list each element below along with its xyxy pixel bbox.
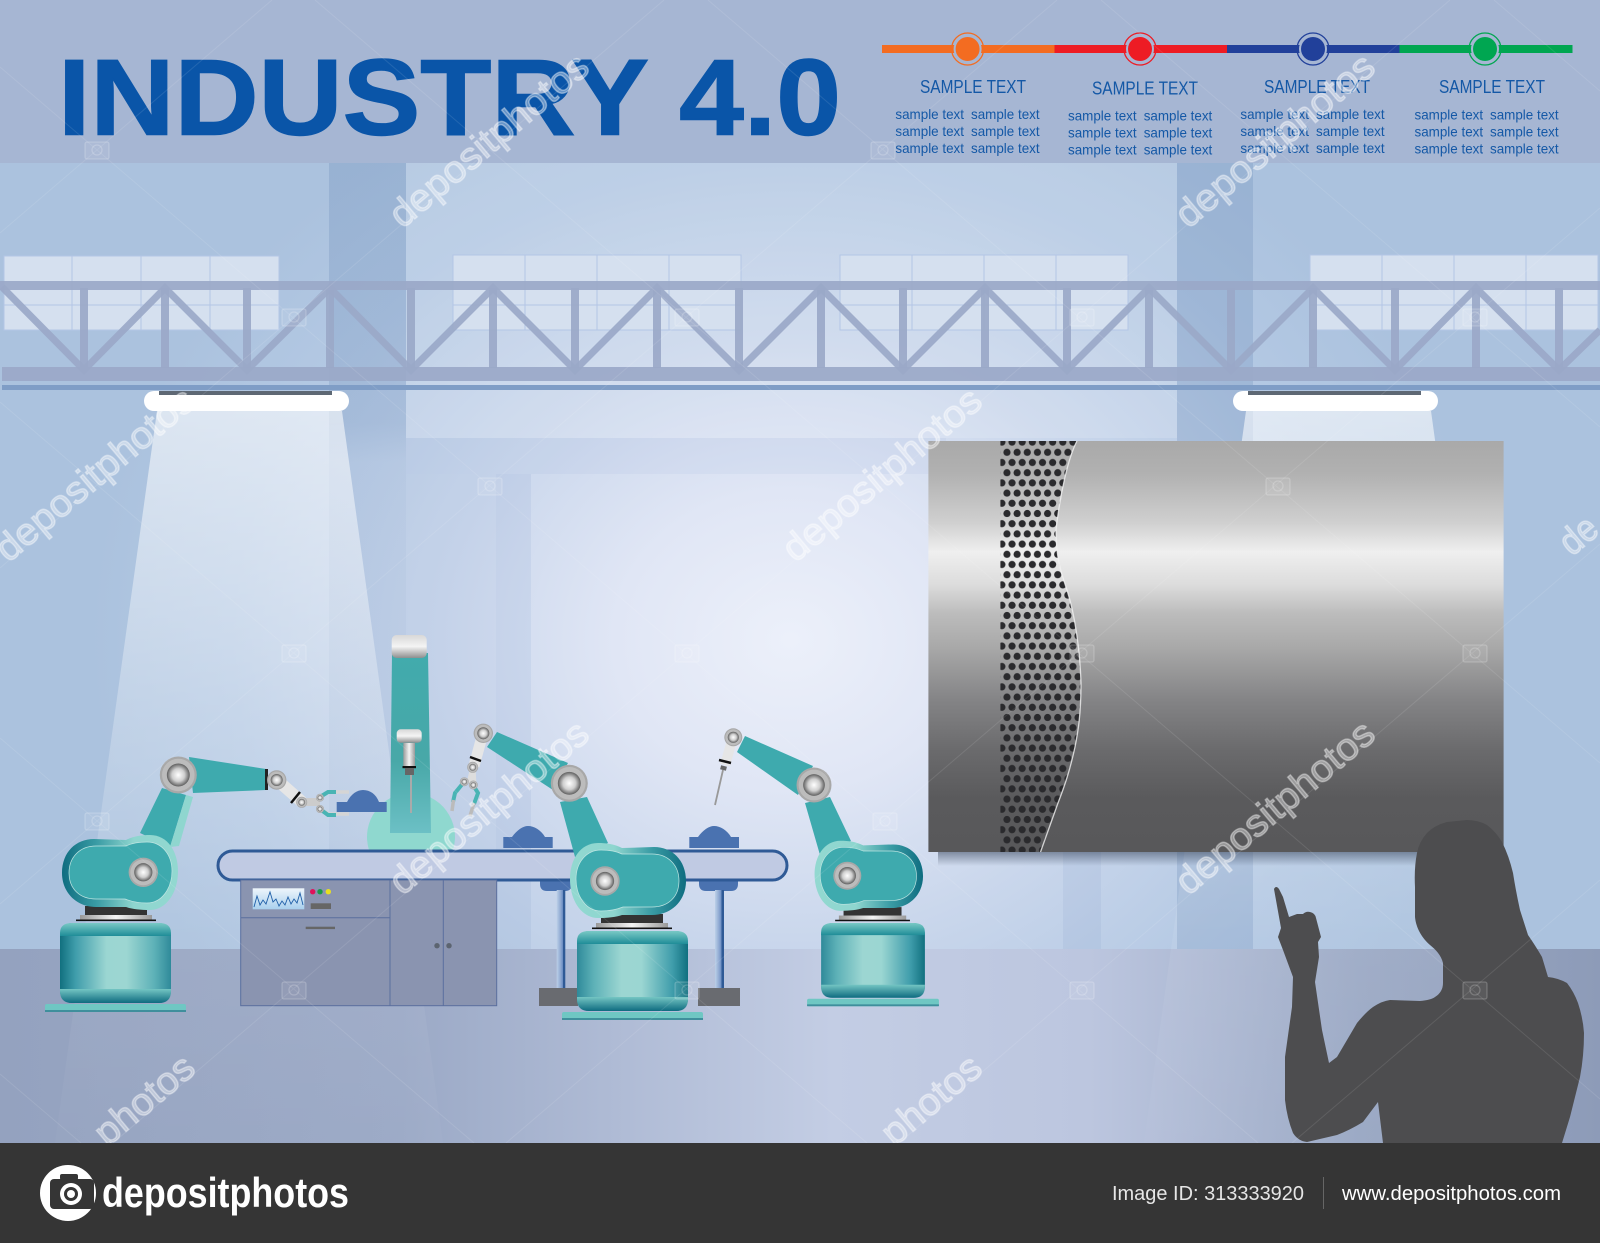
legend column 4 text: sample text xyxy=(1490,140,1559,156)
conveyor belt xyxy=(218,851,787,880)
legend column 2 text: sample text xyxy=(1068,142,1137,158)
person silhouette pointing xyxy=(1274,820,1584,1143)
metal presentation board xyxy=(928,441,1504,866)
footer logo wordmark: depositphotos xyxy=(102,1169,349,1216)
website: www.depositphotos.com xyxy=(1341,1183,1561,1205)
conveyor legs and feet xyxy=(539,880,740,1006)
legend column 1 text: sample text xyxy=(895,140,964,156)
legend column 2 text xyxy=(1068,78,1212,158)
legend column 3 text: sample text xyxy=(1316,140,1385,156)
title: INDUSTRY 4.0 xyxy=(58,36,841,158)
windows xyxy=(4,255,1598,330)
legend column 1 text: sample text xyxy=(895,123,964,139)
watermarks: photos xyxy=(873,1046,990,1154)
legend column 3 text: sample text xyxy=(1316,106,1385,122)
ceiling lamp: left xyxy=(144,391,349,411)
legend column 2 text: sample text xyxy=(1144,108,1212,124)
watermarks: depositphotos xyxy=(381,45,597,236)
light beam: right xyxy=(1144,411,1532,1143)
footer logo icon xyxy=(40,1165,96,1221)
legend column 1 text: sample text xyxy=(971,106,1040,122)
legend column 3 text xyxy=(1240,76,1385,156)
legend column 3 text: sample text xyxy=(1240,140,1309,156)
floor xyxy=(0,949,1600,1143)
overhead truss xyxy=(0,286,1600,388)
legend column 1 text: sample text xyxy=(971,140,1040,156)
footer bar xyxy=(0,1143,1600,1243)
central machine column xyxy=(367,635,455,850)
factory background xyxy=(0,163,1600,950)
header band xyxy=(0,0,1600,163)
legend column 2 text: sample text xyxy=(1144,124,1212,140)
legend column 3 text: sample text xyxy=(1316,123,1385,139)
legend column 2 text: sample text xyxy=(1068,108,1137,124)
image id: Image ID: 313333920 xyxy=(1112,1183,1304,1205)
timeline legend xyxy=(882,33,1572,65)
watermarks: photos xyxy=(86,1046,203,1154)
watermarks: depositphotos xyxy=(1167,712,1383,903)
watermarks: depositphotos xyxy=(1167,45,1383,236)
legend column 4 text: SAMPLE TEXT xyxy=(1439,76,1545,97)
watermarks: depositphotos xyxy=(774,379,990,570)
legend column 1 text xyxy=(895,76,1040,156)
legend column 4 text: sample text xyxy=(1490,106,1559,122)
legend column 3 text: SAMPLE TEXT xyxy=(1264,76,1370,97)
ceiling lamp: right xyxy=(1233,391,1438,411)
legend column 4 text: sample text xyxy=(1490,124,1559,140)
legend column 4 text: sample text xyxy=(1414,140,1483,156)
legend column 2 text: SAMPLE TEXT xyxy=(1092,78,1198,98)
control cabinet xyxy=(241,880,497,1006)
legend column 4 text: sample text xyxy=(1414,106,1483,122)
legend column 2 text: sample text xyxy=(1068,124,1137,140)
legend column 3 text: sample text xyxy=(1240,106,1309,122)
legend column 4 text xyxy=(1414,76,1559,156)
legend column 2 text: sample text xyxy=(1144,142,1212,158)
legend column 1 text: SAMPLE TEXT xyxy=(920,76,1026,97)
light beam: left xyxy=(55,411,443,1143)
legend column 3 text: sample text xyxy=(1240,123,1309,139)
watermarks: depositphotos xyxy=(381,712,597,903)
robot arm 2 xyxy=(452,724,703,1020)
legend column 1 text: sample text xyxy=(971,123,1040,139)
workpieces on conveyor xyxy=(337,790,739,848)
legend column 4 text: sample text xyxy=(1414,124,1483,140)
legend column 1 text: sample text xyxy=(895,106,964,122)
robot arm 3 xyxy=(715,728,939,1006)
robot arm 1 xyxy=(45,756,349,1012)
